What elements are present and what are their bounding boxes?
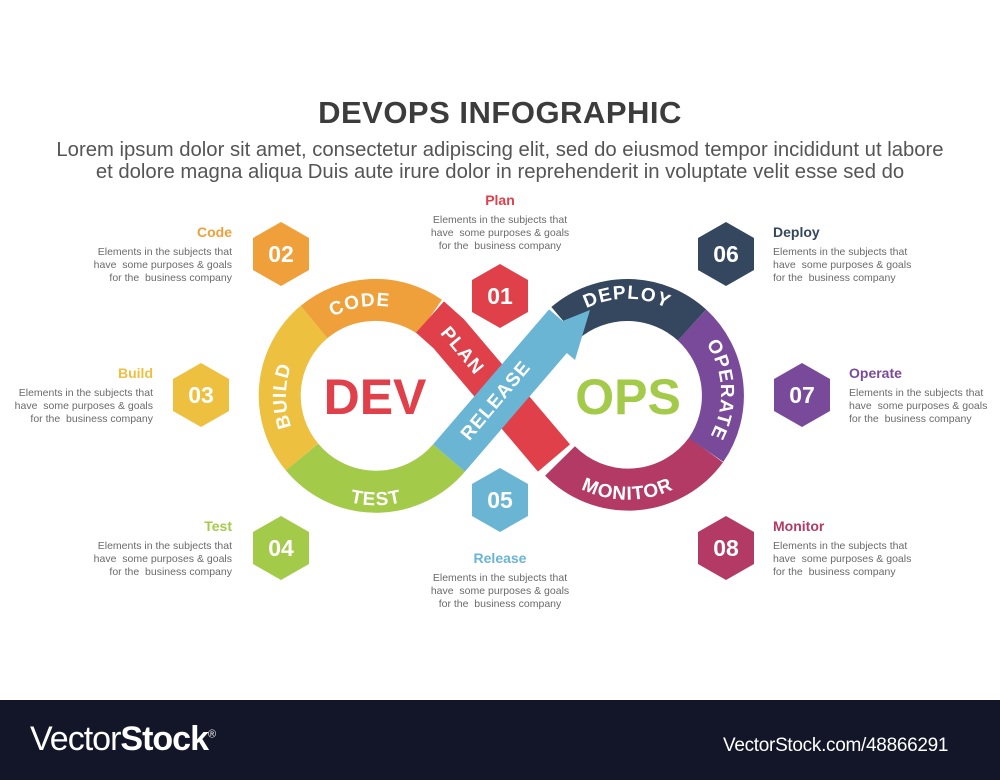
text: monitor: Elements in the subjects that — [773, 540, 907, 552]
text: build: Elements in the subjects that — [19, 387, 153, 399]
text: operate: for the business company — [849, 413, 972, 425]
text: test: have some purposes & goals — [94, 553, 232, 565]
text: operate: have some purposes & goals — [849, 400, 987, 412]
subtitle: et dolore magna aliqua Duis aute irure dolor in reprehenderit in voluptate velit esse sed do — [96, 161, 904, 183]
text: build: have some purposes & goals — [15, 400, 153, 412]
text: code — [94, 224, 232, 284]
hex 02: 02 — [268, 241, 294, 267]
OPS: OPS — [575, 369, 681, 425]
hex 01: 01 — [487, 283, 513, 309]
strip: release — [449, 323, 565, 458]
label BUILD: BUILD — [272, 364, 291, 430]
text: monitor: Monitor — [773, 518, 824, 534]
label PLAN: PLAN — [436, 323, 488, 379]
text: plan: Elements in the subjects that — [433, 214, 567, 226]
label CODE: CODE — [330, 292, 389, 314]
hex 05 — [472, 468, 528, 532]
subtitle: Lorem ipsum dolor sit amet, consectetur adipiscing elit, sed do eiusmod tempor incididunt ut labore — [56, 139, 944, 161]
hex 01 — [472, 264, 528, 328]
text: plan: Plan — [485, 192, 515, 208]
text: release: have some purposes & goals — [431, 585, 569, 597]
hex 04 — [253, 516, 309, 580]
strip: plan — [430, 317, 554, 458]
hex 02 — [253, 222, 309, 286]
text: deploy: Deploy — [773, 224, 820, 240]
label DEPLOY: DEPLOY — [582, 286, 672, 308]
text: deploy: have some purposes & goals — [773, 259, 911, 271]
text: build: for the business company — [30, 413, 153, 425]
hex 04: 04 — [268, 535, 294, 561]
hex 06 — [698, 222, 754, 286]
text: operate: Elements in the subjects that — [849, 387, 983, 399]
arc: build — [280, 322, 314, 457]
arc: monitor — [560, 450, 706, 490]
text: test — [94, 518, 232, 578]
text: test: for the business company — [109, 566, 232, 578]
text: release: Release — [474, 550, 526, 566]
hex 03 — [173, 363, 229, 427]
hex 08: 08 — [713, 535, 739, 561]
arrowhead: release — [540, 310, 590, 360]
text: plan: for the business company — [439, 240, 561, 252]
text: deploy: Elements in the subjects that — [773, 246, 907, 258]
text: code: have some purposes & goals — [94, 259, 232, 271]
text: plan — [431, 192, 569, 252]
text: code: Code — [197, 224, 232, 240]
text: release: Elements in the subjects that — [433, 572, 567, 584]
text: code: for the business company — [109, 272, 232, 284]
hex 05: 05 — [487, 487, 513, 513]
text: build: Build — [118, 365, 153, 381]
DEV: DEV — [324, 369, 427, 425]
subtitle — [56, 139, 944, 183]
text: code: Elements in the subjects that — [98, 246, 232, 258]
text: monitor — [773, 518, 911, 578]
title: DEVOPS INFOGRAPHIC — [318, 95, 682, 130]
hex 07 — [774, 363, 830, 427]
footer bar — [0, 700, 1000, 780]
hex 08 — [698, 516, 754, 580]
text: test: Elements in the subjects that — [98, 540, 232, 552]
arc: code — [314, 300, 430, 322]
text: operate: Operate — [849, 365, 902, 381]
text: release — [431, 550, 569, 610]
text: operate — [849, 365, 987, 425]
hex 07: 07 — [789, 382, 815, 408]
arc: test — [302, 457, 449, 492]
label OPERATE: OPERATE — [708, 340, 734, 440]
arc: operate — [692, 325, 723, 450]
label TEST: TEST — [352, 490, 399, 506]
label MONITOR: MONITOR — [582, 478, 673, 500]
footer url: VectorStock.com/48866291 — [723, 735, 948, 756]
hex 03: 03 — [188, 382, 214, 408]
text: deploy: for the business company — [773, 272, 896, 284]
text: build — [15, 365, 153, 425]
hex 06: 06 — [713, 241, 739, 267]
text: monitor: have some purposes & goals — [773, 553, 911, 565]
text: deploy — [773, 224, 911, 284]
text: monitor: for the business company — [773, 566, 896, 578]
label RELEASE: RELEASE — [457, 357, 535, 445]
text: release: for the business company — [439, 598, 561, 610]
text: test: Test — [204, 518, 232, 534]
footer logo: VectorStock® — [30, 720, 215, 758]
arc: deploy — [565, 300, 692, 325]
text: plan: have some purposes & goals — [431, 227, 569, 239]
